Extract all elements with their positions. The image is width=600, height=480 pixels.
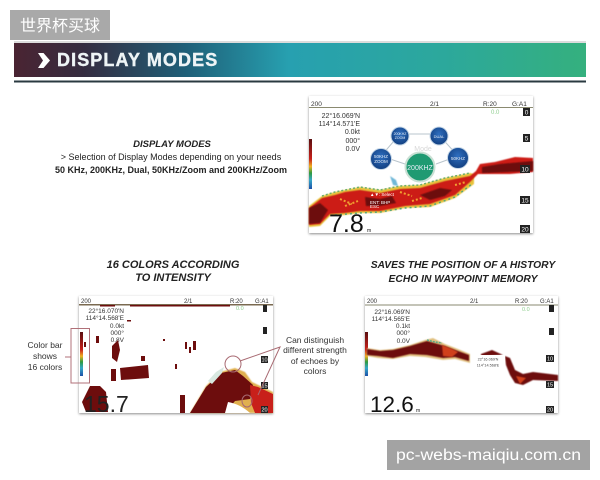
depth scale: 20 <box>547 408 553 414</box>
heading: display modes: DISPLAY MODES <box>57 50 218 70</box>
color bar <box>80 332 83 376</box>
heading: 16 colors: 16 COLORS ACCORDING <box>107 259 240 271</box>
callout: distinguish echoes <box>283 335 347 376</box>
menu hint text: ▲▼: Select <box>370 192 395 197</box>
panel: waypoint sonar screen <box>365 296 558 417</box>
mode selector: 50KHZ <box>374 154 388 159</box>
panel: 16 colors sonar screen: 114°14.568'E <box>86 314 125 322</box>
panel: waypoint sonar screen: R:20 <box>515 299 528 305</box>
watermark: top-left label: 世界杯买球 <box>20 17 100 35</box>
heading: waypoint memory: SAVES THE POSITION OF A HISTORY <box>371 260 556 271</box>
panel: 16 colors sonar screen: 0.8V <box>111 337 125 344</box>
echo: seabed <box>309 173 474 227</box>
depth scale: 10 <box>547 356 553 362</box>
status bar: R:20 <box>483 101 497 108</box>
teal echo mark <box>390 176 398 186</box>
panel: waypoint sonar screen: G:A1 <box>540 299 554 305</box>
panel: 16 colors sonar screen: 2/1 <box>184 299 193 305</box>
big depth value: 7.8 <box>329 210 364 238</box>
callout: distinguish echoes: Can distinguish <box>286 335 344 345</box>
depth scale: 15 <box>521 198 529 204</box>
readouts: 0.0V <box>346 146 360 153</box>
depth scale <box>520 108 530 234</box>
waypoint tag: 22°16.069'N <box>478 358 499 362</box>
readouts: 000° <box>346 137 360 145</box>
depth scale: 20 <box>521 226 529 234</box>
depth scale: 0 <box>525 110 529 116</box>
panel: waypoint sonar screen: 000° <box>397 329 410 337</box>
panel: waypoint sonar screen: 2/1 <box>470 299 479 305</box>
color bar <box>309 139 312 189</box>
panel: waypoint sonar screen: 0.1kt <box>396 323 410 330</box>
mode selector: 200KHZ <box>407 165 434 172</box>
panel: waypoint sonar screen: 0.0 <box>522 307 530 313</box>
heading: 16 colors <box>107 259 240 284</box>
status bar: 2/1 <box>430 101 439 108</box>
status bar <box>311 101 527 108</box>
menu hint text: ESC <box>370 204 380 209</box>
readouts: 22°16.069'N <box>322 112 360 120</box>
mode selector: Mode <box>414 146 432 153</box>
panel: 16 colors sonar screen: 0.0kt <box>110 323 124 330</box>
text block: display modes description: DISPLAY MODES <box>133 139 212 150</box>
panel: 16 colors sonar screen: R:20 <box>230 299 243 305</box>
depth scale: 5 <box>525 136 529 142</box>
watermark: bottom-right label <box>387 440 590 470</box>
text block: display modes description: 50 KHz, 200KHz, Dual, 50KHz/Zoom and 200KHz/Zoom <box>55 165 287 175</box>
panel: 16 colors sonar screen: 200 <box>81 299 92 305</box>
status bar: G:A1 <box>512 101 527 108</box>
panel: sonar screen with mode menu: 0.0 <box>491 110 500 116</box>
mode selector: ZOOM <box>395 136 405 140</box>
callout: distinguish echoes: colors <box>304 366 326 376</box>
depth scale: 10 <box>261 358 268 364</box>
text block: display modes description <box>55 139 287 175</box>
mode selector: 200KHZ <box>394 132 407 136</box>
menu hint text <box>370 192 395 209</box>
header banner <box>14 41 586 82</box>
readouts: 114°14.571'E <box>319 120 360 128</box>
panel: waypoint sonar screen: 114°14.565'E <box>372 315 411 323</box>
depth scale <box>261 305 268 414</box>
panel: 16 colors sonar screen: 0.0 <box>236 306 244 312</box>
echo: seabed ridge <box>190 368 273 413</box>
callout: color bar label: shows <box>33 351 57 361</box>
menu hint text: ENT: BHP <box>370 200 390 205</box>
color bar <box>365 332 368 376</box>
waypoint tag <box>472 355 505 368</box>
depth scale: 20 <box>261 408 268 414</box>
callout: color bar label: Color bar <box>28 340 63 350</box>
depth scale: 15 <box>261 384 268 390</box>
depth scale: 15 <box>547 382 553 388</box>
waypoint tag: 114°14.568'E <box>477 364 500 368</box>
callout: distinguish echoes: different strength <box>283 345 347 355</box>
icon: chevron <box>38 53 50 68</box>
callout: color bar label: 16 colors <box>28 362 62 372</box>
panel: 16 colors sonar screen: 22°16.070'N <box>88 307 124 315</box>
watermark: bottom-right label: pc-webs-maiqiu.com.cn <box>396 447 581 464</box>
status bar: 200 <box>311 101 322 108</box>
panel: waypoint sonar screen: 200 <box>367 299 378 305</box>
heading: waypoint memory <box>371 260 556 285</box>
echo: seabed <box>367 338 470 363</box>
panel: waypoint sonar screen: m <box>416 408 420 414</box>
mode selector <box>370 127 468 182</box>
mode selector: 50KHZ <box>451 156 465 161</box>
big depth value: 15.7 <box>84 391 129 417</box>
readouts: 0.0kt <box>345 129 360 136</box>
heading: 16 colors: TO INTENSITY <box>135 272 212 284</box>
panel: sonar screen with mode menu <box>309 96 533 238</box>
markers <box>225 347 280 407</box>
depth scale <box>546 305 554 414</box>
callout: distinguish echoes: of echoes by <box>291 356 340 366</box>
mode selector: ZOOM <box>374 159 388 164</box>
panel: 16 colors sonar screen: G:A1 <box>255 299 269 305</box>
mode selector: DUAL <box>434 134 445 139</box>
panel: waypoint sonar screen: 0.0V <box>397 338 411 345</box>
watermark: top-left label <box>10 10 110 40</box>
depth scale: 10 <box>521 166 529 174</box>
readouts <box>319 112 360 153</box>
heading: waypoint memory: ECHO IN WAYPOINT MEMORY <box>389 274 539 285</box>
text block: display modes description: > Selection of Display Modes depending on your needs <box>61 152 282 162</box>
panel: waypoint sonar screen: 22°16.069'N <box>374 308 410 316</box>
callout: color bar label <box>28 328 90 383</box>
big depth value: 12.6 <box>370 392 414 417</box>
panel: sonar screen with mode menu: m <box>367 228 371 234</box>
panel: 16 colors sonar screen: 000° <box>111 329 124 337</box>
panel: 16 colors sonar screen <box>79 296 280 417</box>
echoes <box>82 320 196 413</box>
